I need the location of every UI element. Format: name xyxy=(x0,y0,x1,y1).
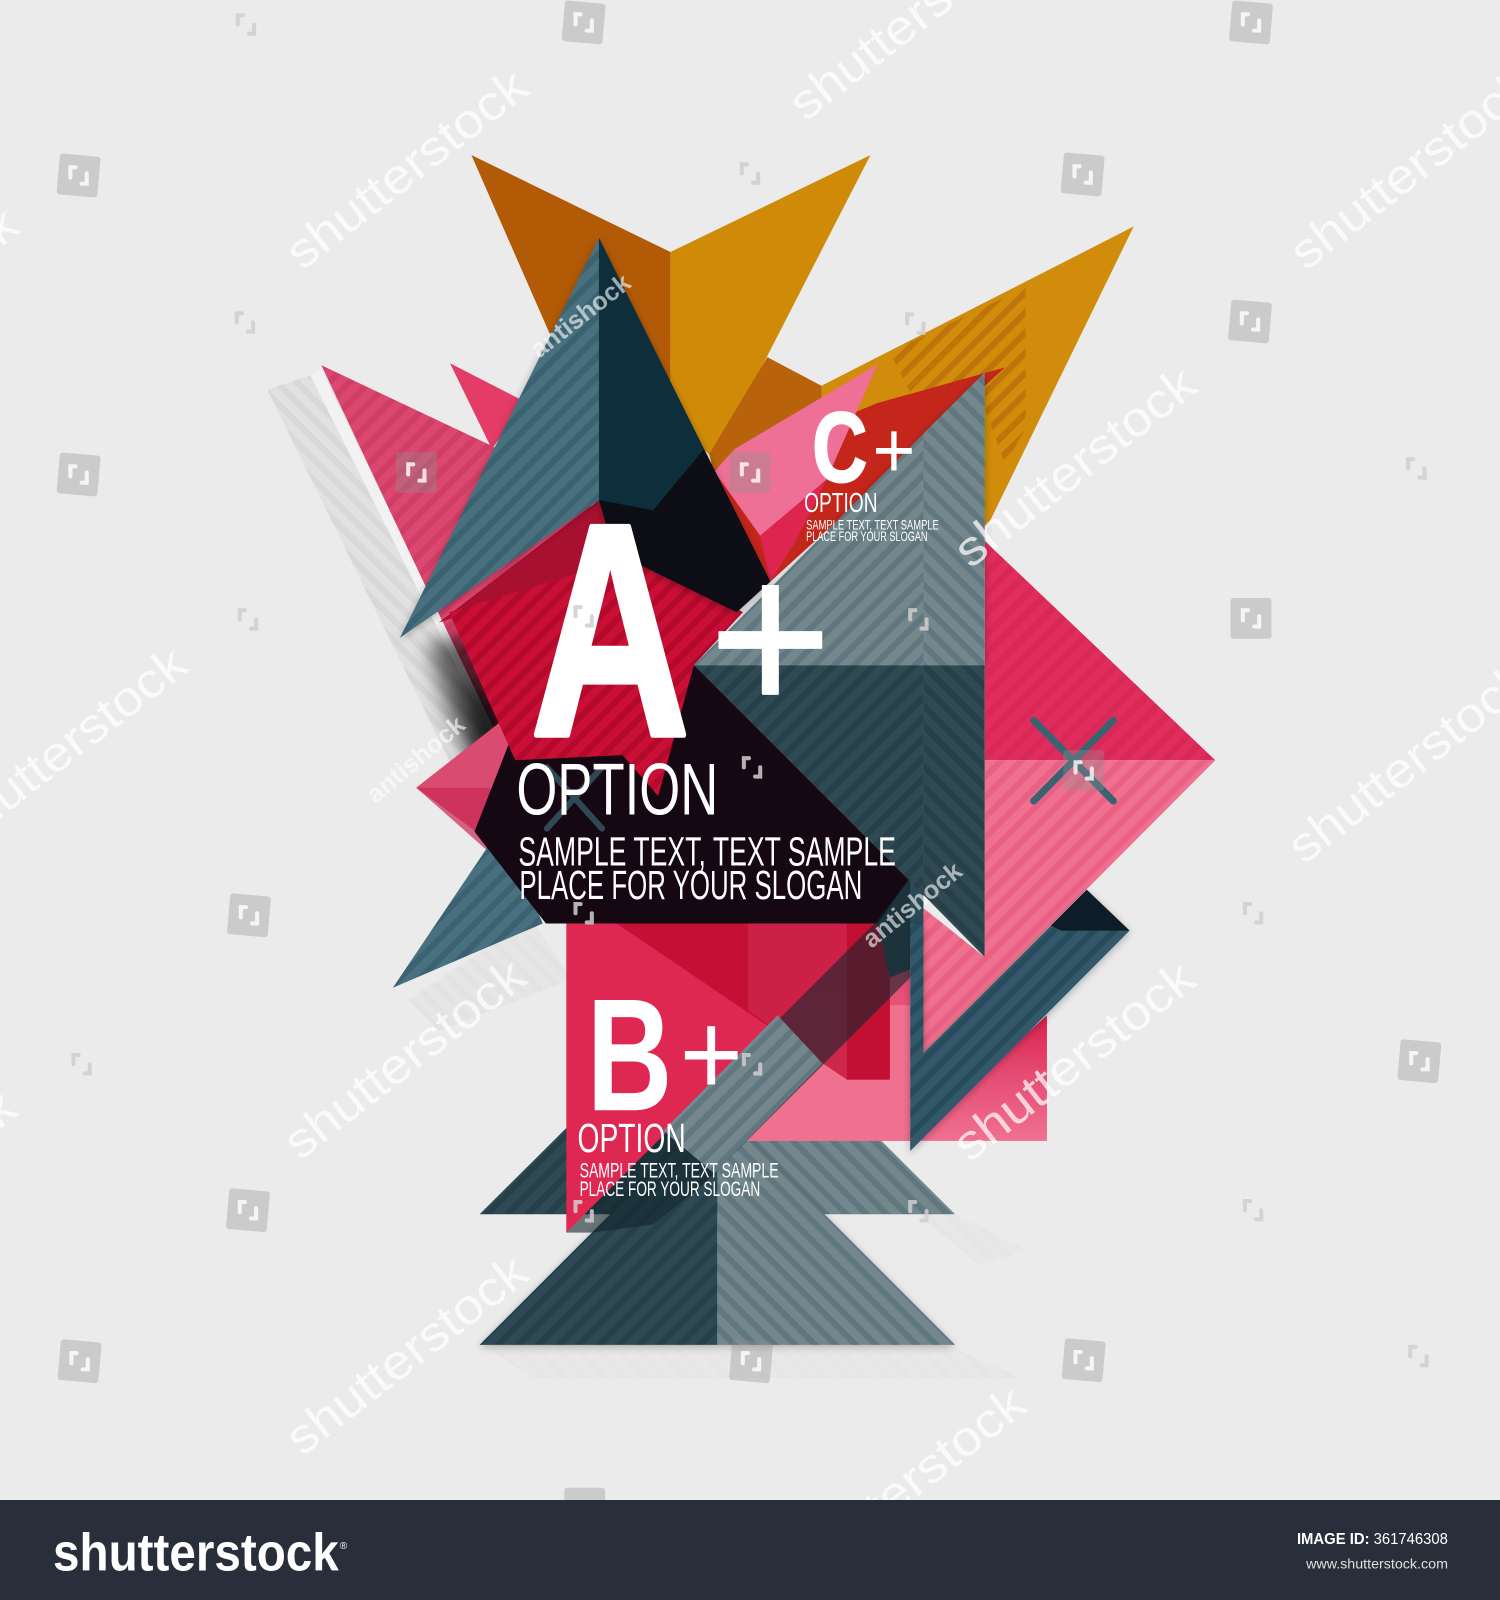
dark right band xyxy=(910,890,1130,1151)
watermark text: shutterstock xyxy=(274,948,536,1170)
watermark text: shutterstock xyxy=(943,950,1206,1172)
x mark right xyxy=(1034,720,1113,801)
watermark text: shutterstock xyxy=(944,356,1207,578)
watermark antishock: antishock xyxy=(858,856,968,954)
depth shadow left xyxy=(429,633,515,776)
watermark text: shutterstock xyxy=(276,1244,538,1466)
x mark under option xyxy=(547,767,602,829)
watermark text: shutterstock xyxy=(276,58,538,280)
lower triangle back xyxy=(480,978,955,1214)
option label A: OPTION xyxy=(516,747,718,830)
registered mark: ® xyxy=(340,1541,348,1552)
option label B: OPTION xyxy=(578,1115,686,1161)
slogan line 1 B: SAMPLE TEXT, TEXT SAMPLE xyxy=(580,1159,779,1183)
pink square lower right xyxy=(737,898,1047,1141)
website: www.shutterstock.com xyxy=(1305,1556,1448,1572)
plus sign B: + xyxy=(680,989,743,1121)
red central diamond xyxy=(416,714,890,1080)
red square triangle xyxy=(566,923,874,1233)
watermark curl marks xyxy=(73,15,1427,1365)
slogan line 1 C: SAMPLE TEXT, TEXT SAMPLE xyxy=(806,518,939,534)
dark backing strip xyxy=(878,878,923,978)
watermark antishock: antishock xyxy=(361,710,471,809)
footer logo: shutterstock xyxy=(53,1523,339,1582)
heading: A+: A xyxy=(531,463,690,800)
plus sign A: + xyxy=(709,513,832,760)
grey triangle top xyxy=(694,372,985,665)
heading: C+: C xyxy=(812,392,867,503)
teal left lower triangle xyxy=(393,829,543,988)
watermark antishock xyxy=(361,268,968,954)
slogan line 2 C: PLACE FOR YOUR SLOGAN xyxy=(806,529,928,545)
red triangle behind A xyxy=(439,500,743,796)
lower triangle front xyxy=(480,1107,955,1345)
plus sign C: + xyxy=(872,406,915,495)
diagonal dark and grey bands xyxy=(566,878,910,1233)
slogan line 1 A: SAMPLE TEXT, TEXT SAMPLE xyxy=(518,828,896,874)
option b block xyxy=(578,965,779,1201)
soft striped shadows xyxy=(267,372,1026,1378)
option c block xyxy=(804,392,939,545)
teal top triangle xyxy=(400,238,770,638)
image id: IMAGE ID: 361746308 xyxy=(1297,1531,1448,1548)
orange star shape xyxy=(471,155,870,459)
option label C: OPTION xyxy=(804,487,878,518)
dark centre xyxy=(474,665,910,923)
heading: B+: B xyxy=(587,965,672,1144)
option a block xyxy=(516,463,896,908)
watermark text: shutterstock xyxy=(774,1375,1036,1597)
footer bar xyxy=(0,1500,1500,1600)
slogan line 2 A: PLACE FOR YOUR SLOGAN xyxy=(519,862,862,908)
orange right triangle xyxy=(709,227,1134,531)
dark triangle below grey xyxy=(694,665,985,957)
pink left triangles xyxy=(310,363,633,816)
C panel translucent layers xyxy=(709,364,1005,582)
watermark antishock: antishock xyxy=(525,268,637,364)
slogan line 2 B: PLACE FOR YOUR SLOGAN xyxy=(580,1177,760,1201)
watermark square glyphs xyxy=(70,14,1428,1369)
pink right diamond xyxy=(923,541,1215,1053)
